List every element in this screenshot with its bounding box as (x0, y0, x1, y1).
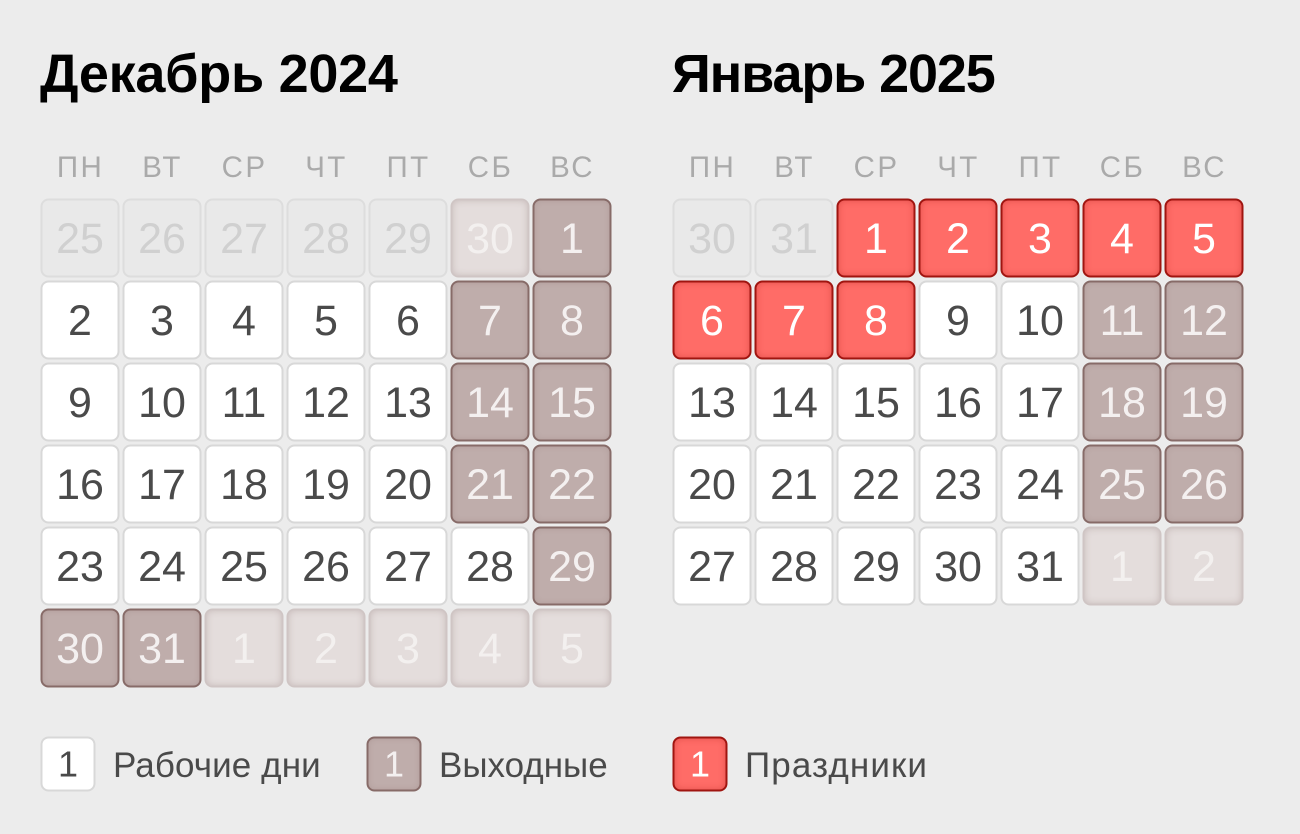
day: January 9 (918, 280, 998, 360)
day: December 16 (40, 444, 120, 524)
day: January 29: 29 (852, 542, 900, 590)
day off: December 14 (450, 362, 530, 442)
day off: February 1 faded: 1 (1110, 542, 1134, 590)
holiday: January 6: 6 (700, 296, 724, 344)
day off: February 2 faded: 2 (1192, 542, 1216, 590)
day: December 26 (286, 526, 366, 606)
day: January 10: 10 (1016, 296, 1064, 344)
day: December 13 (368, 362, 448, 442)
day: November 27: 27 (220, 214, 268, 262)
weekday header: January: ПТ (1018, 151, 1063, 184)
day off: December 31 (122, 608, 202, 688)
day: December 18 (204, 444, 284, 524)
day: November 26: 26 (138, 214, 186, 262)
day: December 24 (122, 526, 202, 606)
day: December 3 (122, 280, 202, 360)
day: January 20: 20 (688, 460, 736, 508)
day: December 10 (122, 362, 202, 442)
day: December 13: 13 (384, 378, 432, 426)
day off: January 2 faded (286, 608, 366, 688)
day: January 21: 21 (770, 460, 818, 508)
day: December 3: 3 (150, 296, 174, 344)
day: December 12 (286, 362, 366, 442)
heading: December 2024: Декабрь 2024 (40, 44, 398, 104)
day: December 5 (286, 280, 366, 360)
day off: January 5 faded: 5 (560, 624, 584, 672)
day: December 25 (204, 526, 284, 606)
day: January 17: 17 (1016, 378, 1064, 426)
weekday header: December: СР (222, 151, 267, 184)
day off: January 11 (1082, 280, 1162, 360)
weekday header: January: ВС (1182, 151, 1227, 184)
day off: December 7: 7 (478, 296, 502, 344)
day: January 30: 30 (934, 542, 982, 590)
day: December 24: 24 (138, 542, 186, 590)
legend label: working days: Рабочие дни (113, 746, 321, 785)
day: November 29: 29 (384, 214, 432, 262)
day: January 16: 16 (934, 378, 982, 426)
day: January 10 (1000, 280, 1080, 360)
day: November 28 (286, 198, 366, 278)
day: December 4: 4 (232, 296, 256, 344)
legend swatch: working days (40, 736, 96, 792)
day off: January 19 (1164, 362, 1244, 442)
heading: January 2025: Январь 2025 (672, 44, 995, 104)
day: January 28 (754, 526, 834, 606)
day: January 22 (836, 444, 916, 524)
day off: January 26 (1164, 444, 1244, 524)
holiday: January 4: 4 (1110, 214, 1134, 262)
day: January 28: 28 (770, 542, 818, 590)
day: December 28: 28 (466, 542, 514, 590)
day: November 29 (368, 198, 448, 278)
holiday: January 1: 1 (864, 214, 888, 262)
legend swatch: working days: 1 (58, 744, 78, 784)
weekday header: January: ВТ (774, 151, 815, 184)
weekday header: December: ПН (57, 151, 104, 184)
day: January 13 (672, 362, 752, 442)
legend swatch: weekends: 1 (384, 744, 404, 784)
holiday: January 6 (672, 280, 752, 360)
holiday: January 5: 5 (1192, 214, 1216, 262)
day: December 19 (286, 444, 366, 524)
legend (40, 736, 928, 792)
day: January 20 (672, 444, 752, 524)
day off: December 15: 15 (548, 378, 596, 426)
day: January 22: 22 (852, 460, 900, 508)
day: January 27 (672, 526, 752, 606)
weekday header: December: СБ (468, 151, 513, 184)
day off: January 11: 11 (1100, 296, 1144, 344)
holiday: January 3: 3 (1028, 214, 1052, 262)
day: December 4 (204, 280, 284, 360)
weekday header: December: ЧТ (305, 151, 348, 184)
day: December 9: 9 (68, 378, 92, 426)
day: November 27 (204, 198, 284, 278)
day: December 12: 12 (302, 378, 350, 426)
day off: December 29: 29 (548, 542, 596, 590)
day: January 15: 15 (852, 378, 900, 426)
day: January 15 (836, 362, 916, 442)
day off: January 19: 19 (1180, 378, 1228, 426)
day: November 25 (40, 198, 120, 278)
weekday header: January: ЧТ (937, 151, 980, 184)
day: December 28 (450, 526, 530, 606)
day: January 31: 31 (1016, 542, 1064, 590)
day: December 2: 2 (68, 296, 92, 344)
weekday header: January (689, 151, 1227, 184)
day: January 17 (1000, 362, 1080, 442)
day: December 27: 27 (384, 542, 432, 590)
day: December 18: 18 (220, 460, 268, 508)
holiday: January 2 (918, 198, 998, 278)
day off: December 29 (532, 526, 612, 606)
day off: December 7 (450, 280, 530, 360)
day off: January 12: 12 (1180, 296, 1228, 344)
date grid: December (40, 198, 612, 688)
day off: January 18: 18 (1098, 378, 1146, 426)
day: December 9 (40, 362, 120, 442)
weekday header: December (57, 151, 595, 184)
day: January 14: 14 (770, 378, 818, 426)
holiday: January 2: 2 (946, 214, 970, 262)
day off: January 25 (1082, 444, 1162, 524)
day off: January 5 faded (532, 608, 612, 688)
day: December 6 (368, 280, 448, 360)
day: January 23 (918, 444, 998, 524)
day: November 26 (122, 198, 202, 278)
day off: December 15 (532, 362, 612, 442)
legend label: weekends: Выходные (439, 746, 608, 785)
day off: January 25: 25 (1098, 460, 1146, 508)
day off: December 8: 8 (560, 296, 584, 344)
day: December 6: 6 (396, 296, 420, 344)
holiday: January 8: 8 (864, 296, 888, 344)
day off: January 3 faded (368, 608, 448, 688)
day: January 23: 23 (934, 460, 982, 508)
day: January 24: 24 (1016, 460, 1064, 508)
day: December 11 (204, 362, 284, 442)
day off: January 2 faded: 2 (314, 624, 338, 672)
holiday: January 4 (1082, 198, 1162, 278)
legend swatch: weekends (366, 736, 422, 792)
day: December 20 (368, 444, 448, 524)
weekday header: January: ПН (689, 151, 736, 184)
weekday header: January: СБ (1100, 151, 1145, 184)
date grid: January (672, 198, 1244, 606)
day off: February 1 faded (1082, 526, 1162, 606)
holiday: January 3 (1000, 198, 1080, 278)
day: December 30 faded (672, 198, 752, 278)
day: December 23: 23 (56, 542, 104, 590)
weekday header: January: СР (854, 151, 899, 184)
day: December 10: 10 (138, 378, 186, 426)
weekday header: December: ПТ (386, 151, 431, 184)
day: January 30 (918, 526, 998, 606)
holiday: January 5 (1164, 198, 1244, 278)
day: November 28: 28 (302, 214, 350, 262)
day off: December 21 (450, 444, 530, 524)
day off: December 14: 14 (466, 378, 514, 426)
day: January 14 (754, 362, 834, 442)
legend swatch: holidays (672, 736, 728, 792)
day: December 27 (368, 526, 448, 606)
day off: December 30 (40, 608, 120, 688)
day: December 23 (40, 526, 120, 606)
day off: January 18 (1082, 362, 1162, 442)
holiday: January 7: 7 (782, 296, 806, 344)
day: January 27: 27 (688, 542, 736, 590)
day: January 24 (1000, 444, 1080, 524)
day off: December 22 (532, 444, 612, 524)
day: January 31 (1000, 526, 1080, 606)
legend label: holidays: Праздники (745, 746, 928, 785)
day: December 16: 16 (56, 460, 104, 508)
day: December 20: 20 (384, 460, 432, 508)
day: December 17 (122, 444, 202, 524)
panel: January 2025 calendar (672, 44, 1244, 606)
legend swatch: holidays: 1 (690, 744, 710, 784)
day: December 31 faded (754, 198, 834, 278)
day off: December 21: 21 (466, 460, 514, 508)
day off: January 3 faded: 3 (396, 624, 420, 672)
holiday: January 1 (836, 198, 916, 278)
day: December 19: 19 (302, 460, 350, 508)
day off: December 22: 22 (548, 460, 596, 508)
holiday: January 8 (836, 280, 916, 360)
day off: January 26: 26 (1180, 460, 1228, 508)
day: December 30 faded: 30 (688, 214, 736, 262)
day off: February 2 faded (1164, 526, 1244, 606)
day: January 29 (836, 526, 916, 606)
day: December 11: 11 (222, 378, 266, 426)
day: December 17: 17 (138, 460, 186, 508)
day: January 9: 9 (946, 296, 970, 344)
holiday: January 7 (754, 280, 834, 360)
day: January 16 (918, 362, 998, 442)
day: January 21 (754, 444, 834, 524)
day off: November 30: 30 (466, 214, 514, 262)
day off: January 1 faded (204, 608, 284, 688)
day: December 5: 5 (314, 296, 338, 344)
day: December 2 (40, 280, 120, 360)
day off: January 12 (1164, 280, 1244, 360)
day off: December 1 (532, 198, 612, 278)
day: November 25: 25 (56, 214, 104, 262)
day off: November 30 (450, 198, 530, 278)
panel: December 2024 calendar (40, 44, 612, 688)
day off: January 4 faded: 4 (478, 624, 502, 672)
day: January 13: 13 (688, 378, 736, 426)
day off: December 31: 31 (138, 624, 186, 672)
weekday header: December: ВТ (142, 151, 183, 184)
day: December 26: 26 (302, 542, 350, 590)
day: December 25: 25 (220, 542, 268, 590)
day off: December 1: 1 (560, 214, 584, 262)
day: December 31 faded: 31 (770, 214, 818, 262)
weekday header: December: ВС (550, 151, 595, 184)
day off: January 4 faded (450, 608, 530, 688)
day off: December 8 (532, 280, 612, 360)
day off: January 1 faded: 1 (232, 624, 256, 672)
day off: December 30: 30 (56, 624, 104, 672)
